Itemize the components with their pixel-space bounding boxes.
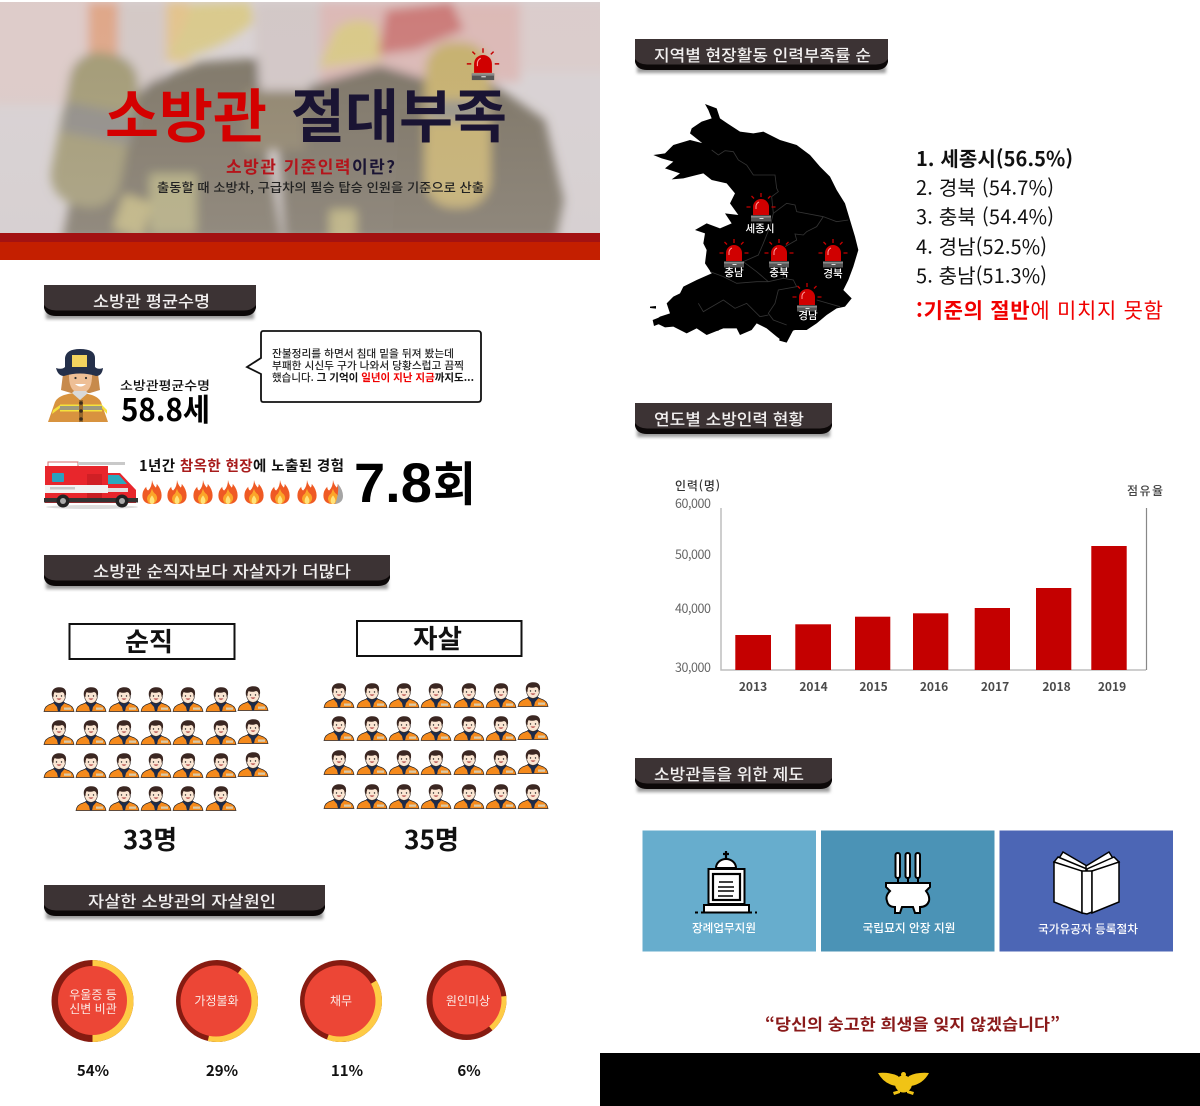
banner: 소방관 평균수명: [44, 285, 256, 319]
icon: siren: [467, 48, 499, 80]
map of South Korea: [650, 104, 858, 343]
box: 순직: 순직: [125, 622, 173, 659]
card: 국립묘지 안장 지원: 국립묘지 안장 지원: [862, 920, 956, 936]
marker: 세종시: 세종시: [746, 221, 774, 236]
percent labels: 11%: [331, 1060, 363, 1081]
description: 출동할 때 소방차, 구급차의 필승 탑승 인원을 기준으로 산출: [157, 177, 484, 196]
y axis labels: 40,000: [675, 598, 711, 617]
icon: fire truck: [44, 462, 138, 509]
number: 7.8회: 회: [433, 446, 476, 515]
subtitle: 소방관 기준인력이란?: [226, 153, 395, 178]
banner: 순직자보다 자살자가 더많다: [44, 555, 390, 589]
donut: 6%: [426, 960, 507, 1040]
banner: 연도별 소방인력 현황: [635, 403, 832, 437]
ranking list: 5. 충남(51.3%): [916, 260, 1047, 289]
y axis labels: [675, 493, 711, 676]
banner: 자살원인: [44, 885, 325, 919]
x axis labels: [739, 678, 1126, 695]
number: 7.8회: 7.8: [354, 451, 432, 514]
banner: 소방관 평균수명: 소방관 평균수명: [93, 288, 210, 312]
marker: 경남: [792, 283, 822, 323]
count: 33명: 33명: [123, 820, 177, 857]
marker: 경남: 경남: [798, 308, 818, 323]
y axis labels: 50,000: [675, 544, 711, 563]
label: 평균수명: 소방관평균수명: [120, 375, 210, 394]
card: 장례업무지원: [642, 830, 816, 952]
ranking list: :기준의 절반에 미치지 못함: [916, 295, 1163, 325]
banner: 소방관들을 위한 제도: 소방관들을 위한 제도: [654, 761, 804, 785]
x axis labels: 2013: [739, 678, 767, 695]
number: 7.8회: [354, 446, 476, 515]
icon: gold eagle emblem: [878, 1072, 929, 1095]
marker: 충북: [764, 239, 794, 280]
card: 국가유공자 등록절차: 국가유공자 등록절차: [1038, 921, 1138, 937]
panel: 순직: [44, 622, 268, 857]
x axis labels: 2015: [859, 678, 888, 695]
marker: 경북: [818, 239, 848, 281]
bar chart: [675, 477, 1163, 695]
speech bubble: 했습니다. 그 기억이 일년이 지난 지금까지도...: [272, 370, 474, 385]
banner: 지역별 현장활동 인력부족률 순: 지역별 현장활동 인력부족률 순: [654, 42, 871, 66]
percent labels: [77, 1060, 481, 1081]
marker: 경북: 경북: [823, 266, 843, 281]
donut: 6%: 원인미상: [446, 992, 490, 1009]
ranking list: 2. 경북 (54.7%): [916, 172, 1054, 201]
card: 장례업무지원: 장례업무지원: [692, 920, 756, 936]
banner: 연도별 소방인력 현황: 연도별 소방인력 현황: [654, 406, 804, 430]
bars: [735, 546, 1127, 670]
icon: incense burner: [886, 853, 930, 913]
x axis labels: 2018: [1042, 678, 1071, 695]
map silhouette with regions: [650, 104, 858, 343]
y axis labels: 30,000: [675, 657, 711, 676]
donut: 54%: 신변 비관: [69, 1000, 117, 1017]
box: 자살: 자살: [413, 619, 462, 656]
percent labels: 29%: [206, 1060, 238, 1081]
title: 소방관: [105, 70, 267, 154]
banner: 순직자보다 자살자가 더많다: 소방관 순직자보다 자살자가 더많다: [93, 558, 351, 582]
speech bubble: 부패한 시신두 구가 나와서 당황스럽고 끔찍: [272, 358, 464, 373]
ranking list: 1. 세종시(56.5%): [916, 143, 1073, 172]
ranking list: 3. 충북 (54.4%): [916, 201, 1054, 230]
panel: 자살: [324, 619, 548, 857]
x axis labels: 2014: [799, 678, 828, 695]
title: 절대부족: [291, 70, 507, 154]
card: 국립묘지 안장 지원: [821, 830, 994, 952]
ranking list: [916, 143, 1163, 325]
donut: 54%: 우울증 등: [69, 986, 117, 1003]
donut: 29%: 가정불화: [194, 992, 239, 1009]
x axis labels: 2016: [920, 678, 948, 695]
box: 순직: [70, 622, 234, 659]
x axis labels: 2019: [1098, 678, 1126, 695]
footer: [600, 1053, 1200, 1106]
text: 참옥한 현장 경험: 1년간 참옥한 현장에 노출된 경험: [139, 455, 344, 476]
red band: [0, 233, 600, 260]
percent labels: 6%: [457, 1060, 481, 1081]
card: 국가유공자 등록절차: [1000, 830, 1173, 952]
donut: 29%: [176, 960, 258, 1042]
marker: 충남: 충남: [724, 265, 744, 280]
count: 35명: 35명: [404, 820, 459, 857]
banner: 소방관들을 위한 제도: [635, 758, 832, 792]
number: 58.8세: 58.8세: [121, 385, 210, 430]
axes: [721, 508, 1146, 670]
percent labels: 54%: [77, 1060, 109, 1081]
donut: 11%: [300, 960, 382, 1042]
quote: “당신의 숭고한 희생을 잊지 않겠습니다”: [765, 1011, 1060, 1035]
donut: 54%: [52, 960, 134, 1042]
banner: 지역별 현장활동 인력부족률 순: [635, 39, 888, 73]
icon: firefighter woman: [48, 349, 108, 422]
banner: 자살원인: 자살한 소방관의 자살원인: [88, 888, 276, 912]
marker: 충북: 충북: [769, 265, 789, 280]
axis titles: 인력(명): [675, 477, 720, 494]
speech bubble: 잔불정리를 하면서 침대 밑을 뒤져 봤는데: [272, 346, 454, 361]
icon: open book: [1054, 852, 1119, 914]
title: [105, 70, 507, 154]
panel: hero header: [0, 0, 610, 260]
y axis labels: 60,000: [675, 493, 711, 512]
bar chart: 점유율: [1127, 482, 1163, 499]
marker: 충남: [720, 239, 748, 280]
box: 자살: [357, 619, 522, 656]
pictogram: 35 persons: [324, 682, 548, 808]
ranking list: 4. 경남(52.5%): [916, 231, 1047, 260]
icon: tombstone: [695, 851, 757, 912]
hero photo of firefighters: [0, 0, 610, 240]
marker: 세종시: [746, 193, 776, 236]
x axis labels: 2017: [981, 678, 1009, 695]
panel: 자살원인 donuts: [52, 960, 507, 1081]
speech bubble: [247, 331, 481, 402]
donut: 11%: 채무: [330, 992, 352, 1009]
icons: flames: [142, 480, 343, 504]
pictogram: 33 persons: [44, 686, 268, 810]
